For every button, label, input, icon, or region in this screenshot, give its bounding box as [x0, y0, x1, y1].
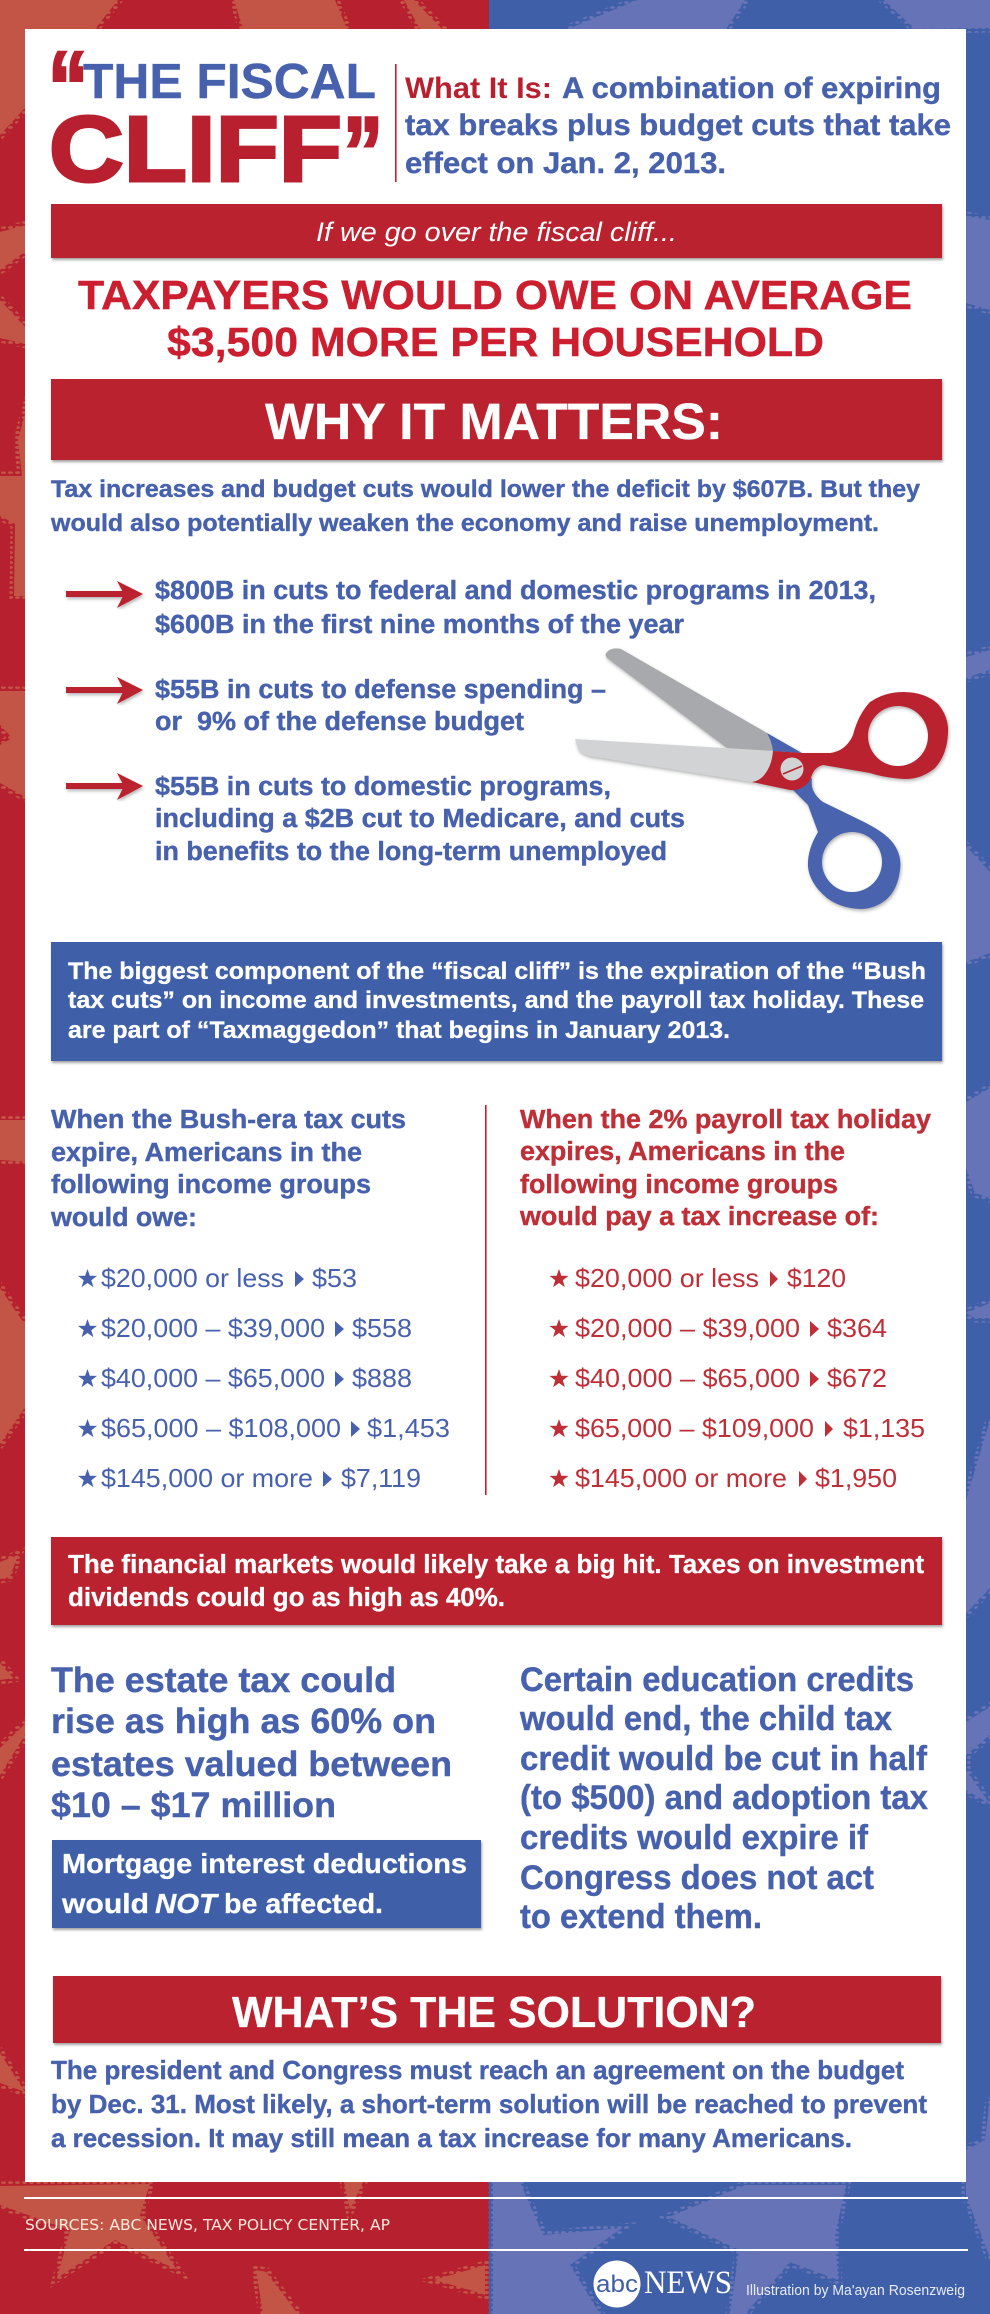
bullet text: in benefits to the long-term unemployed	[155, 838, 667, 866]
banner: what's the solution	[53, 1976, 941, 2043]
heading	[519, 1106, 932, 1231]
headline: taxpayers would owe: TAXPAYERS WOULD OWE ON AVERAGE	[78, 272, 912, 318]
callout: mortgage interest	[52, 1840, 481, 1928]
panel: Bush-era tax cuts	[50, 1106, 450, 1493]
title line one: THE FISCAL	[83, 55, 376, 109]
callout: financial markets: dividends could go as high as 40%.	[68, 1584, 505, 1612]
text: education credits: credit would be cut in half	[520, 1740, 928, 1778]
income list: $20,000 or less	[575, 1263, 759, 1293]
title line two: CLIFF	[49, 97, 342, 201]
callout: mortgage interest: would	[61, 1888, 149, 1919]
income list: $888	[352, 1363, 412, 1393]
income list: $145,000 or more	[101, 1463, 313, 1493]
text: education credits: Congress does not act	[520, 1859, 874, 1897]
income list: $672	[827, 1363, 887, 1393]
what it is text: effect on Jan. 2, 2013.	[405, 147, 726, 180]
column divider	[485, 1105, 487, 1495]
intro paragraph	[50, 476, 921, 537]
banner: if we go over	[51, 204, 942, 258]
what it is text: tax breaks plus budget cuts that take	[405, 109, 951, 142]
what it is text	[405, 72, 951, 180]
text: education credits: to extend them.	[520, 1898, 762, 1936]
closing quote mark: ”	[343, 97, 383, 209]
income list: $1,135	[843, 1413, 925, 1443]
callout: financial markets: The financial markets would likely take a big hit. Taxes on investment	[68, 1551, 925, 1579]
footer rule bottom	[24, 2249, 968, 2251]
icon: arrow	[66, 677, 143, 704]
text: education credits: credits would expire if	[520, 1819, 869, 1857]
heading	[50, 1106, 406, 1232]
callout: biggest component: are part of “Taxmaggedon” that begins in January 2013.	[68, 1017, 730, 1044]
income list: $65,000 – $109,000	[575, 1413, 814, 1443]
logo: abc news	[594, 2260, 732, 2308]
bullet: federal cuts	[66, 577, 876, 639]
banner: why it matters: WHY IT MATTERS:	[265, 393, 723, 450]
banner: why it matters	[51, 379, 942, 460]
banner: what's the solution: WHAT’S THE SOLUTION?	[232, 1988, 756, 2037]
income list: $20,000 – $39,000	[575, 1313, 800, 1343]
income list: $20,000 or less	[101, 1263, 284, 1293]
headline: taxpayers would owe: $3,500 MORE PER HOUSEHOLD	[167, 319, 824, 365]
income list: $145,000 or more	[575, 1463, 787, 1493]
bullet text: $55B in cuts to defense spending –	[155, 676, 606, 704]
heading: would pay a tax increase of:	[519, 1203, 879, 1231]
income list: $364	[827, 1313, 887, 1343]
what it is text: A combination of expiring	[562, 72, 941, 105]
icon: arrow	[66, 773, 143, 800]
text: estate tax: The estate tax could	[51, 1661, 396, 1700]
panel: payroll tax holiday	[519, 1106, 932, 1493]
income list: $20,000 – $39,000	[101, 1313, 325, 1343]
icon: arrow	[66, 581, 143, 608]
sources: SOURCES: ABC NEWS, TAX POLICY CENTER, AP	[25, 2216, 390, 2234]
bullet text: $800B in cuts to federal and domestic programs in 2013,	[155, 577, 876, 605]
solution paragraph: by Dec. 31. Most likely, a short-term solution will be reached to prevent	[51, 2089, 927, 2119]
income list: $7,119	[341, 1463, 421, 1493]
callout: biggest component: The biggest component of the “fiscal cliff” is the expiration of the “Bush	[68, 958, 926, 985]
text: estate tax: estates valued between	[51, 1745, 452, 1784]
callout: financial markets	[51, 1537, 942, 1625]
icon: scissors	[575, 648, 948, 909]
intro paragraph: would also potentially weaken the economy and raise unemployment.	[50, 510, 879, 537]
income list	[78, 1263, 450, 1493]
heading: expire, Americans in the	[51, 1139, 362, 1167]
what it is text: What It Is:	[405, 72, 552, 105]
footer rule top	[24, 2197, 968, 2199]
income list: $65,000 – $108,000	[101, 1413, 341, 1443]
intro paragraph: Tax increases and budget cuts would lower the deficit by $607B. But they	[51, 476, 921, 503]
text: education credits	[519, 1661, 928, 1936]
text: education credits: (to $500) and adoption tax	[520, 1779, 928, 1817]
text: estate tax: rise as high as 60% on	[51, 1702, 436, 1741]
text: education credits: Certain education credits	[520, 1661, 914, 1699]
income list: $120	[787, 1263, 846, 1293]
bullet text	[155, 773, 685, 866]
logo: abc news: NEWS	[644, 2265, 732, 2301]
heading: following income groups	[520, 1171, 838, 1199]
heading: expires, Americans in the	[520, 1138, 845, 1166]
income list	[549, 1263, 925, 1493]
income list: $40,000 – $65,000	[575, 1363, 800, 1393]
heading: When the Bush-era tax cuts	[51, 1106, 406, 1134]
heading: would owe:	[50, 1204, 197, 1232]
bullet: domestic cuts	[66, 773, 685, 866]
title: The Fiscal Cliff	[48, 31, 383, 209]
callout: biggest component	[51, 942, 942, 1061]
callout: mortgage interest: be affected.	[224, 1888, 383, 1919]
headline: taxpayers would owe	[78, 272, 912, 365]
text: estate tax	[51, 1661, 452, 1825]
bullet text: including a $2B cut to Medicare, and cuts	[155, 805, 685, 833]
text: education credits: would end, the child tax	[519, 1700, 892, 1738]
income list: $40,000 – $65,000	[101, 1363, 325, 1393]
logo: abc news: abc	[596, 2271, 638, 2298]
bullet text	[155, 676, 606, 736]
bullet text: or 9% of the defense budget	[155, 708, 525, 736]
text: estate tax: $10 – $17 million	[51, 1786, 336, 1825]
title divider	[395, 64, 397, 182]
callout: mortgage interest: Mortgage interest deductions	[62, 1848, 467, 1879]
banner: if we go over: If we go over the fiscal cliff...	[316, 217, 677, 247]
heading: following income groups	[51, 1171, 371, 1199]
bullet: defense cuts	[66, 676, 606, 736]
callout: biggest component: tax cuts” on income and investments, and the payroll tax holiday. These	[68, 987, 924, 1014]
bullet text: $55B in cuts to domestic programs,	[155, 773, 611, 801]
solution paragraph: The president and Congress must reach an agreement on the budget	[51, 2055, 904, 2085]
opening quote mark: “	[48, 31, 88, 143]
income list: $53	[312, 1263, 357, 1293]
bullet text: $600B in the first nine months of the year	[155, 611, 684, 639]
bullet text	[155, 577, 876, 639]
illustration credit: Illustration by Ma'ayan Rosenzweig	[746, 2282, 965, 2299]
heading: When the 2% payroll tax holiday	[520, 1106, 932, 1134]
income list: $558	[352, 1313, 412, 1343]
solution paragraph: a recession. It may still mean a tax increase for many Americans.	[51, 2123, 852, 2153]
callout: mortgage interest: NOT	[155, 1888, 220, 1919]
income list: $1,453	[367, 1413, 450, 1443]
income list: $1,950	[815, 1463, 897, 1493]
solution paragraph	[51, 2055, 927, 2153]
